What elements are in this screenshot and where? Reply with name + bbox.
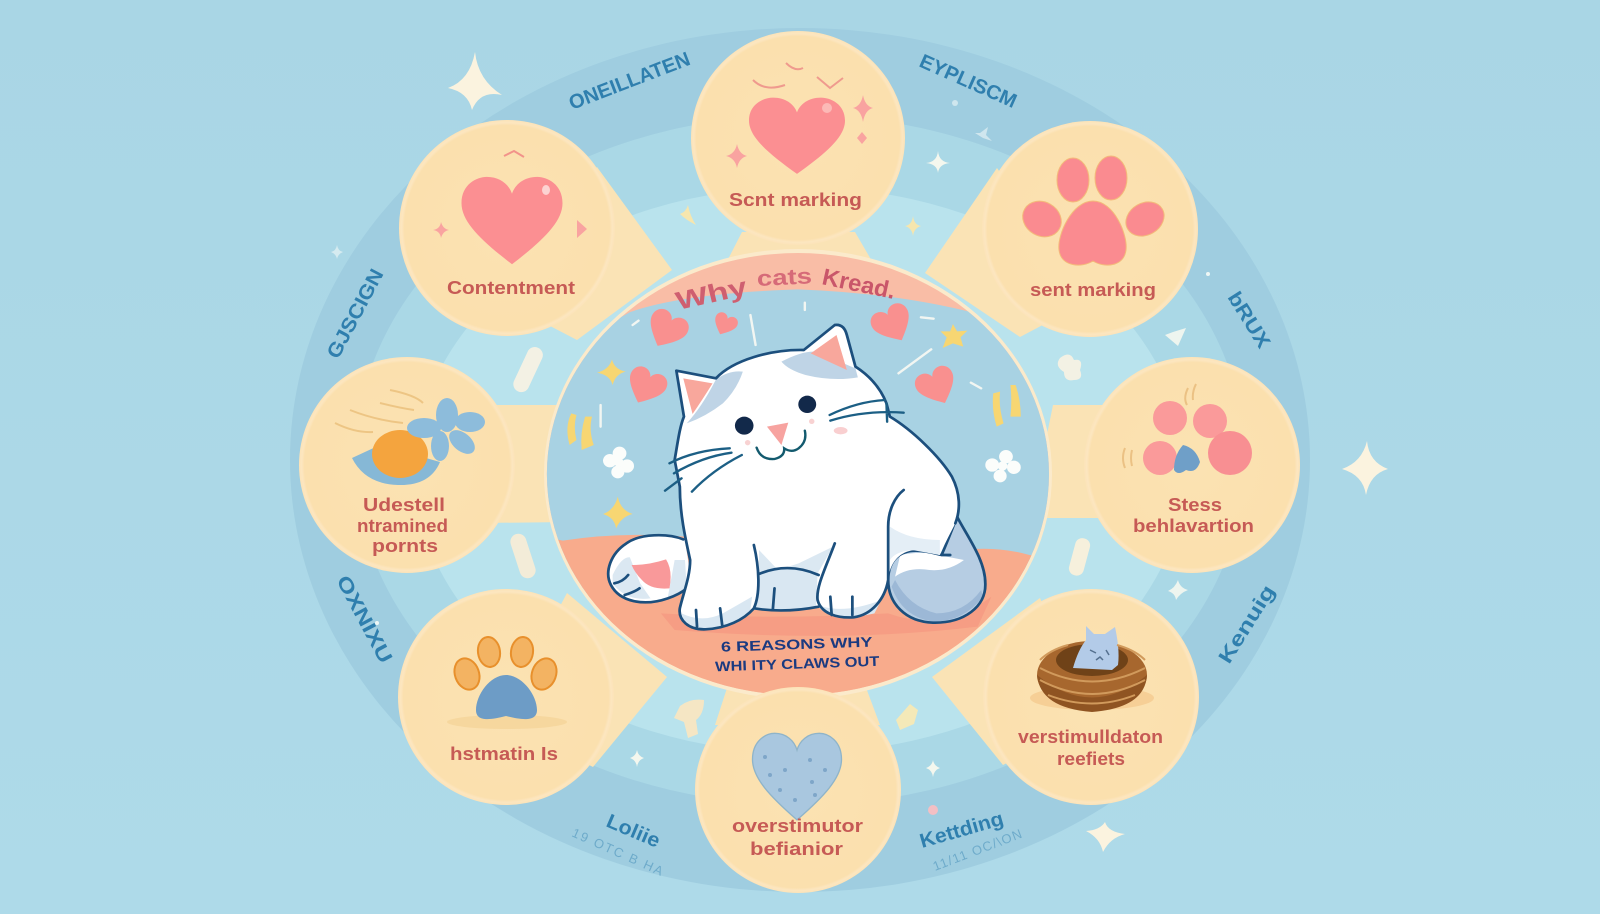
panel: bottom right nest: [983, 589, 1199, 805]
centre panel: cat illustration: [530, 247, 1067, 700]
ring labels: [323, 48, 1280, 879]
icon: pink blobs: [1123, 384, 1252, 475]
centre subtitle: WHI ITY CLAWS OUT: [715, 654, 880, 675]
label: Udestell: [363, 495, 445, 515]
icon: blue heart: [752, 733, 842, 820]
ring labels: ONEILLATEN: [566, 48, 693, 115]
panel: right stress: behlavartion: [1133, 516, 1254, 536]
icon: pink paw: [1016, 156, 1170, 265]
ring labels: OXNIXU: [332, 572, 396, 667]
centre panel: cat illustration: cats: [756, 264, 813, 291]
centre title: Why: [673, 273, 751, 316]
label: overstimutor: [732, 816, 863, 836]
centre panel: cat illustration: Kread.: [820, 265, 898, 305]
ring labels: 11/11 OC/\ON: [931, 826, 1024, 874]
ring labels: Loliie: [603, 810, 663, 852]
hearts and stars around the cat: [567, 300, 1021, 528]
ring labels: bRUX: [1223, 288, 1275, 353]
outer ring bands: [290, 28, 1310, 892]
ring labels: 19 OTC B HA: [570, 825, 666, 879]
panel: bottom right nest: reefiets: [1057, 749, 1125, 769]
panel: left food and flower: ntramined: [357, 516, 448, 536]
centre subtitle: 6 REASONS WHY: [721, 635, 873, 656]
panel: right stress: [1084, 357, 1300, 573]
panel: top scent marking: [691, 31, 905, 245]
ring labels: EYPLISCM: [916, 50, 1020, 113]
ring labels: Kenuig: [1215, 581, 1280, 668]
icon: bowl, orange and flower: [335, 390, 485, 485]
label: Stess: [1168, 495, 1222, 515]
label: Contentment: [447, 278, 575, 298]
icon: heart: [726, 63, 873, 174]
connector spokes: [480, 167, 1110, 767]
label: sent marking: [1030, 280, 1156, 300]
panel: bottom overstimulation: [695, 687, 901, 893]
decorative sparkles: [331, 52, 1388, 852]
panel: left food and flower: pornts: [372, 536, 438, 556]
label: hstmatin Is: [450, 744, 558, 764]
panel: contentment: [399, 120, 615, 336]
panel: left food and flower: [299, 357, 515, 573]
label: Scnt marking: [729, 190, 862, 210]
cat: [608, 325, 985, 629]
icon: orange and blue paw: [447, 636, 567, 729]
panel: bottom left paw: [398, 589, 614, 805]
icon: cat in nest: [1030, 626, 1154, 712]
panel: bottom overstimulation: befianior: [750, 839, 843, 859]
icon: heart: [433, 151, 587, 264]
panel: paw scent marking: [982, 121, 1198, 337]
ring labels: GJSCIGN: [323, 265, 388, 362]
centre subtitle: [715, 635, 880, 675]
ring labels: Kettding: [917, 808, 1006, 853]
label: verstimulldaton: [1018, 727, 1163, 747]
